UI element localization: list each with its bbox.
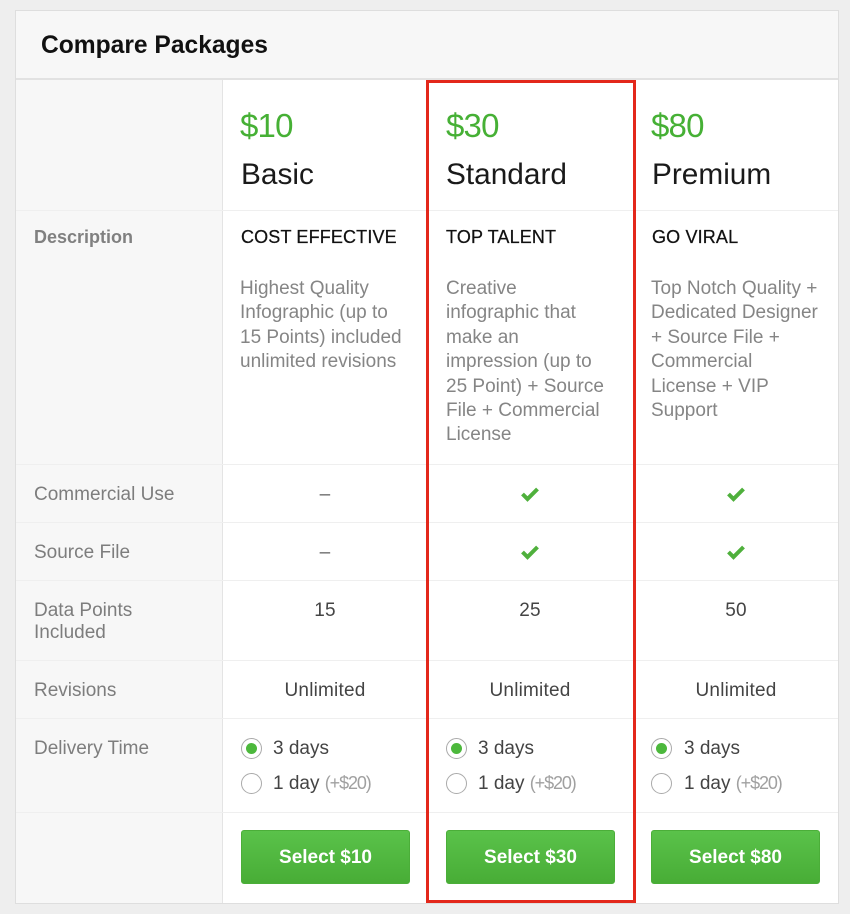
radio label: premium 3 days: 3 days: [684, 738, 740, 759]
description: standard: Creative: [446, 278, 517, 299]
package name: Premium: Premium: [652, 158, 771, 191]
button: select $80: Select $80: [689, 847, 782, 868]
description: standard: [446, 278, 604, 445]
radio: standard 1 day: [446, 773, 467, 794]
row label: Data Points Included: [34, 600, 132, 643]
radio label: standard 3 days: 3 days: [478, 738, 534, 759]
revisions: premium: Unlimited: [696, 680, 776, 701]
icon: check commercial premium: [727, 488, 745, 502]
tagline: go viral: GO VIRAL: [652, 227, 738, 247]
button: select $30: [446, 830, 615, 884]
panel: label column: [16, 80, 223, 903]
button: select $30: Select $30: [484, 847, 577, 868]
source file: basic dash: –: [320, 542, 330, 563]
row label: Source File: Source File: [34, 542, 130, 563]
description: standard: File + Commercial: [446, 400, 600, 421]
radio label: basic 1 day: 1 day (+$20): [273, 773, 371, 794]
description: premium: Support: [651, 400, 718, 421]
row label: Revisions: Revisions: [34, 680, 116, 701]
row label: Data Points Included: Included: [34, 622, 106, 643]
radio: basic 3 days: [241, 738, 262, 759]
description: basic: [240, 278, 402, 372]
description: standard: make an: [446, 327, 519, 348]
package name: Basic: Basic: [241, 158, 314, 191]
price: $10: $10: [240, 107, 293, 144]
commercial use: basic dash: –: [320, 484, 330, 505]
description: premium: Dedicated Designer: [651, 302, 818, 323]
icon: check commercial standard: [521, 488, 539, 502]
row label: Description: Description: [34, 227, 133, 247]
data points: 15: 15: [314, 600, 336, 621]
description: basic: Highest Quality: [240, 278, 369, 299]
description: premium: [651, 278, 818, 421]
description: premium: Top Notch Quality +: [651, 278, 817, 299]
radio: standard 3 days: [446, 738, 467, 759]
radio label: basic 3 days: 3 days: [273, 738, 329, 759]
panel: header bar: [16, 11, 838, 80]
revisions: standard: Unlimited: [490, 680, 570, 701]
tagline: top talent: TOP TALENT: [446, 227, 556, 247]
radio: premium 3 days: [651, 738, 672, 759]
icon: check source standard: [521, 546, 539, 560]
icon: check source premium: [727, 546, 745, 560]
row label: Commercial Use: Commercial Use: [34, 484, 174, 505]
description: standard: 25 Point) + Source: [446, 376, 604, 397]
description: premium: Commercial: [651, 351, 752, 372]
description: basic: Infographic (up to: [240, 302, 388, 323]
radio label: premium 1 day: 1 day (+$20): [684, 773, 782, 794]
data points: 50: 50: [725, 600, 747, 621]
package name: Standard: Standard: [446, 158, 567, 191]
description: standard: impression (up to: [446, 351, 592, 372]
description: standard: License: [446, 424, 512, 445]
description: premium: + Source File +: [651, 327, 780, 348]
revisions: basic: Unlimited: [284, 680, 366, 701]
button: select $10: [241, 830, 410, 884]
price: $30: $30: [446, 107, 499, 144]
button: select $10: Select $10: [279, 847, 372, 868]
radio: premium 1 day: [651, 773, 672, 794]
description: basic: unlimited revisions: [240, 351, 396, 372]
description: standard: infographic that: [446, 302, 576, 323]
highlight: red box around standard package: [426, 80, 636, 903]
tagline: cost effective: COST EFFECTIVE: [241, 227, 397, 247]
data points: 25: 25: [519, 600, 541, 621]
price: $80: $80: [651, 107, 704, 144]
row label: Data Points Included: Data Points: [34, 600, 132, 621]
radio label: standard 1 day: 1 day (+$20): [478, 773, 576, 794]
button: select $80: [651, 830, 820, 884]
row label: Delivery Time: Delivery Time: [34, 738, 149, 759]
description: basic: 15 Points) included: [240, 327, 402, 348]
heading: Compare Packages: Compare Packages: [41, 32, 268, 59]
radio: basic 1 day: [241, 773, 262, 794]
description: premium: License + VIP: [651, 376, 769, 397]
